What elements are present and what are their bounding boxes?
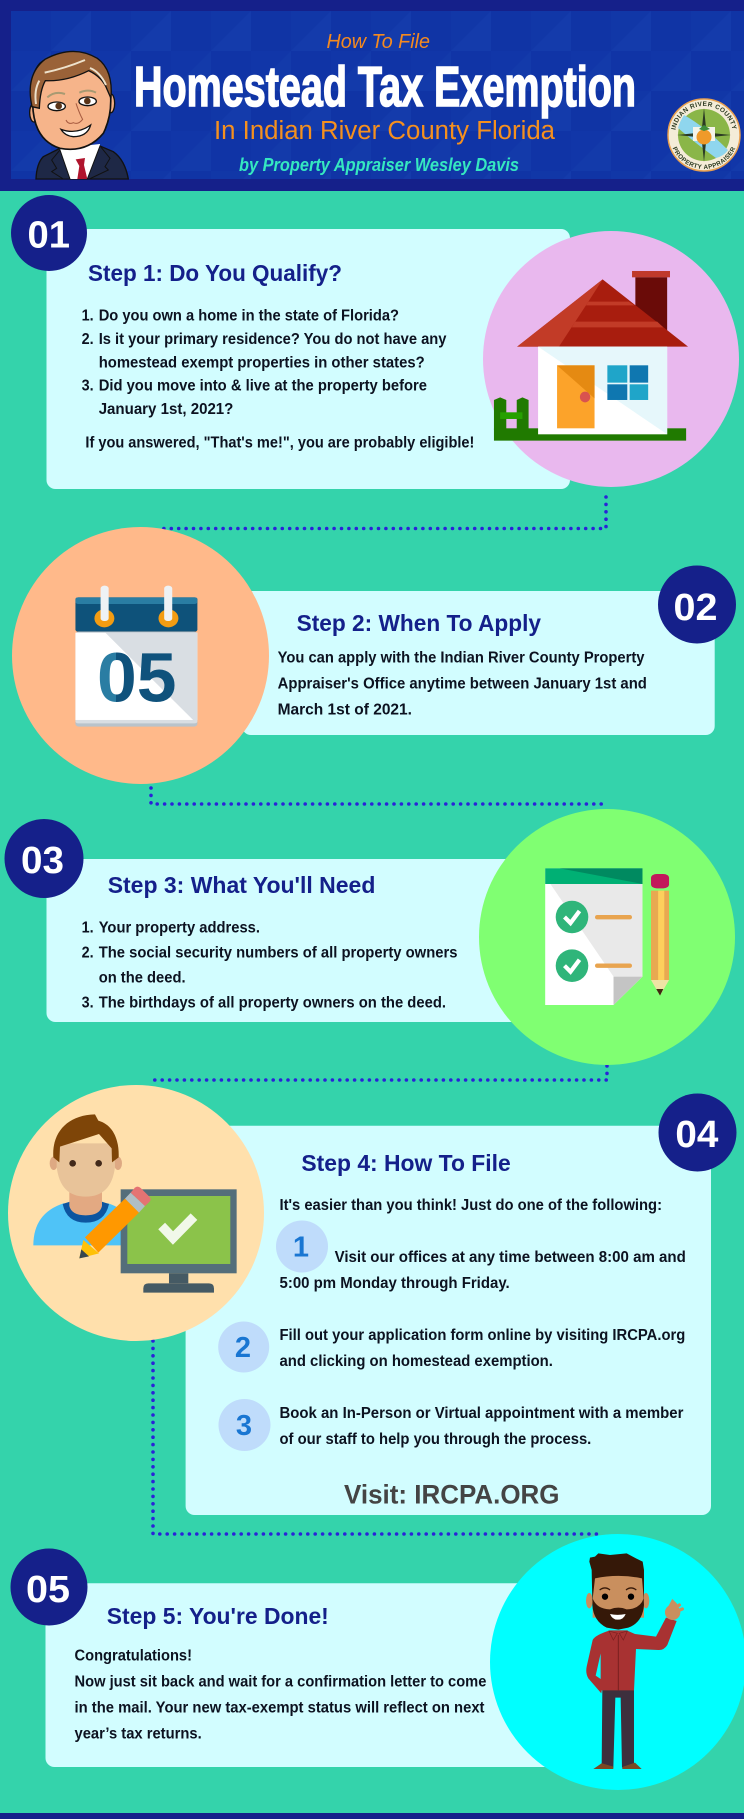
text: step 1 questions: Do you own a home in the state of Florida?	[99, 308, 399, 325]
option 3	[218, 1399, 683, 1451]
text: step 1 questions: Did you move into & live at the property before	[99, 378, 427, 395]
panel: step 1	[11, 195, 739, 489]
call to action: website: Visit: IRCPA.ORG	[344, 1479, 560, 1509]
heading: step 5: Step 5: You're Done!	[107, 1603, 329, 1629]
panel: step 2	[12, 527, 736, 784]
option 2: Fill out your application form online by visiting IRCPA.org	[280, 1327, 685, 1344]
text: step 1 questions: If you answered, "That's me!", you are probably eligible!	[85, 434, 474, 451]
text: congratulations	[74, 1648, 487, 1743]
text: what you need list: Your property address.	[99, 920, 260, 937]
badge: 02	[658, 566, 736, 644]
text: what you need list: 3.	[82, 995, 94, 1012]
heading: step 1: Step 1: Do You Qualify?	[88, 260, 342, 286]
text: what you need list	[82, 920, 457, 1012]
card: step 2	[242, 591, 715, 735]
badge: 04	[658, 1094, 736, 1172]
subtitle: county: In Indian River County Florida	[214, 117, 556, 145]
option 1: 1	[293, 1232, 309, 1264]
icon: person with monitor	[33, 1114, 237, 1293]
dotted connector: step 2 to 3	[151, 788, 606, 804]
text: step 1 questions	[82, 308, 474, 451]
header banner	[0, 0, 744, 191]
badge: 04: 04	[675, 1114, 718, 1156]
text: when to apply: Appraiser's Office anytime between January 1st and	[278, 676, 647, 693]
text: congratulations: year’s tax returns.	[74, 1726, 202, 1743]
card: step 1	[46, 229, 570, 489]
text: step 1 questions: January 1st, 2021?	[99, 401, 233, 418]
option 2	[218, 1322, 685, 1372]
icon: appraiser avatar	[30, 51, 128, 179]
text: what you need list: 1.	[82, 920, 94, 937]
text: step 1 questions: 1.	[82, 308, 94, 325]
option 1: Visit our offices at any time between 8:00 am and	[335, 1249, 686, 1266]
text: step 1 questions: Is it your primary residence? You do not have any	[99, 331, 447, 348]
subtitle: how to file: How To File	[326, 31, 430, 53]
text: congratulations: Now just sit back and wait for a confirmation letter to come	[74, 1674, 487, 1691]
text: when to apply	[278, 650, 647, 719]
circle: man background	[490, 1534, 744, 1790]
text: what you need list: 2.	[82, 945, 94, 962]
badge: 02: 02	[674, 587, 718, 629]
text: when to apply: You can apply with the Indian River County Property	[278, 650, 645, 667]
panel: step 3	[4, 809, 735, 1065]
dotted connector: step 3 to 4	[152, 1066, 607, 1080]
footer bar	[0, 1813, 744, 1819]
circle: checklist background	[479, 809, 735, 1065]
badge: 03: 03	[21, 840, 64, 882]
text: when to apply: March 1st of 2021.	[278, 702, 412, 719]
circle: house background	[483, 231, 739, 487]
dotted connector: step 4 to 5	[153, 1341, 603, 1534]
badge: 05	[10, 1548, 88, 1626]
card: step 4	[186, 1126, 711, 1515]
text: step 1 questions: 3.	[82, 378, 94, 395]
badge: 01: 01	[28, 214, 70, 256]
icon: property appraiser seal: INDIAN RIVER COUNTY	[671, 101, 737, 130]
badge: 05: 05	[26, 1569, 70, 1611]
option 3: 3	[236, 1410, 252, 1442]
option 1: 5:00 pm Monday through Friday.	[280, 1275, 510, 1292]
heading: step 2: Step 2: When To Apply	[297, 610, 541, 636]
badge: 03	[4, 819, 84, 898]
panel: step 4	[8, 1085, 736, 1515]
text: what you need list: on the deed.	[99, 970, 186, 987]
text: what you need list: The birthdays of all property owners on the deed.	[99, 995, 446, 1012]
text: intro: It's easier than you think! Just do one of the following:	[280, 1197, 662, 1214]
icon: house	[494, 271, 688, 441]
icon: checklist and pencil	[545, 868, 669, 1005]
text: step 1 questions: homestead exempt properties in other states?	[99, 354, 425, 371]
panel: step 5	[10, 1534, 744, 1790]
text: step 1 questions: 2.	[82, 331, 94, 348]
circle: calendar background	[12, 527, 269, 784]
dotted connector: step 1 to 2	[159, 497, 606, 528]
heading: step 3: Step 3: What You'll Need	[108, 872, 375, 898]
byline: by Property Appraiser Wesley Davis	[239, 154, 519, 175]
option 3: of our staff to help you through the process.	[280, 1431, 591, 1448]
option 2: 2	[235, 1332, 251, 1364]
option 2: and clicking on homestead exemption.	[280, 1353, 553, 1370]
text: congratulations: Congratulations!	[74, 1648, 192, 1665]
option 3: Book an In-Person or Virtual appointment with a member	[280, 1405, 683, 1422]
icon: calendar: 05	[97, 638, 176, 716]
heading: step 4: Step 4: How To File	[301, 1150, 511, 1176]
text: congratulations: in the mail. Your new tax-exempt status will reflect on next	[74, 1700, 484, 1717]
icon: calendar	[75, 586, 197, 727]
option 1	[276, 1220, 686, 1292]
icon: property appraiser seal	[667, 98, 741, 172]
card: step 3	[46, 859, 530, 1022]
badge: 01	[11, 195, 87, 271]
circle: person background	[8, 1085, 264, 1341]
icon: waving man	[586, 1553, 682, 1769]
text: what you need list: The social security numbers of all property owners	[99, 945, 457, 962]
icon: property appraiser seal: PROPERTY APPRAISER	[672, 146, 736, 170]
card: step 5	[46, 1583, 570, 1767]
